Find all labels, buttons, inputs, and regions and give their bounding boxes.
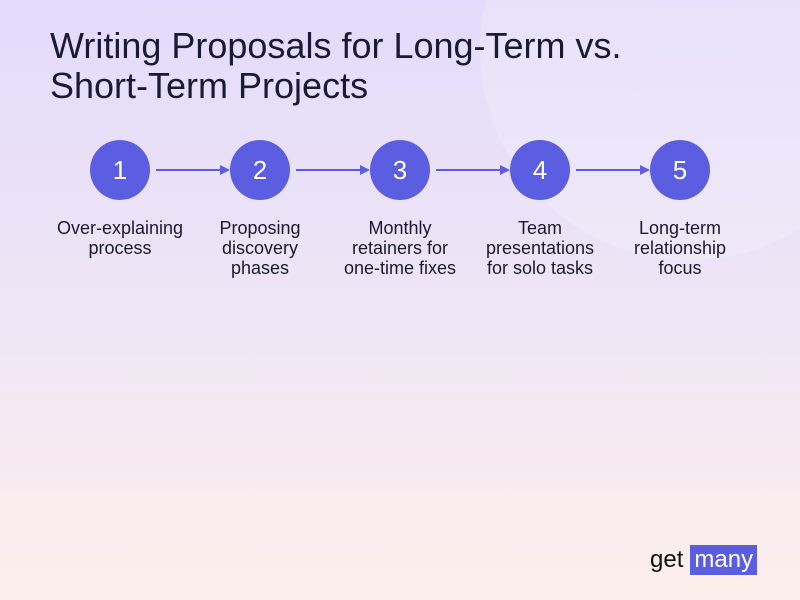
step 5 <box>650 140 710 200</box>
step 3: 3 <box>393 155 407 185</box>
logo <box>650 545 757 575</box>
step 2 <box>230 140 290 200</box>
title: Writing Proposals for Long-Term vs. <box>50 25 622 66</box>
label 4: Team <box>518 218 562 238</box>
label 2: Proposing <box>219 218 301 238</box>
step 4: 4 <box>533 155 547 185</box>
label 3 <box>344 218 456 278</box>
step 3 <box>370 140 430 200</box>
title <box>50 25 622 106</box>
label 2 <box>219 218 301 278</box>
label 4: presentations <box>486 238 594 258</box>
label 3: Monthly <box>368 218 432 238</box>
step 1 <box>90 140 150 200</box>
label 5: relationship <box>634 238 726 258</box>
label 1: Over-explaining <box>57 218 183 238</box>
logo: get <box>650 546 683 573</box>
label 5: Long-term <box>639 218 721 238</box>
label 5 <box>634 218 726 278</box>
label 1 <box>57 218 183 258</box>
step 5: 5 <box>673 155 687 185</box>
label 3: retainers for <box>352 238 448 258</box>
label 4 <box>486 218 594 278</box>
step 4 <box>510 140 570 200</box>
logo: many <box>694 546 753 573</box>
label 4: for solo tasks <box>487 258 593 278</box>
label 2: phases <box>231 258 289 278</box>
label 1: process <box>88 238 152 258</box>
label 5: focus <box>658 258 702 278</box>
label 3: one-time fixes <box>344 258 456 278</box>
step 1: 1 <box>113 155 127 185</box>
step 2: 2 <box>253 155 267 185</box>
label 2: discovery <box>222 238 298 258</box>
title: Short-Term Projects <box>50 65 368 106</box>
